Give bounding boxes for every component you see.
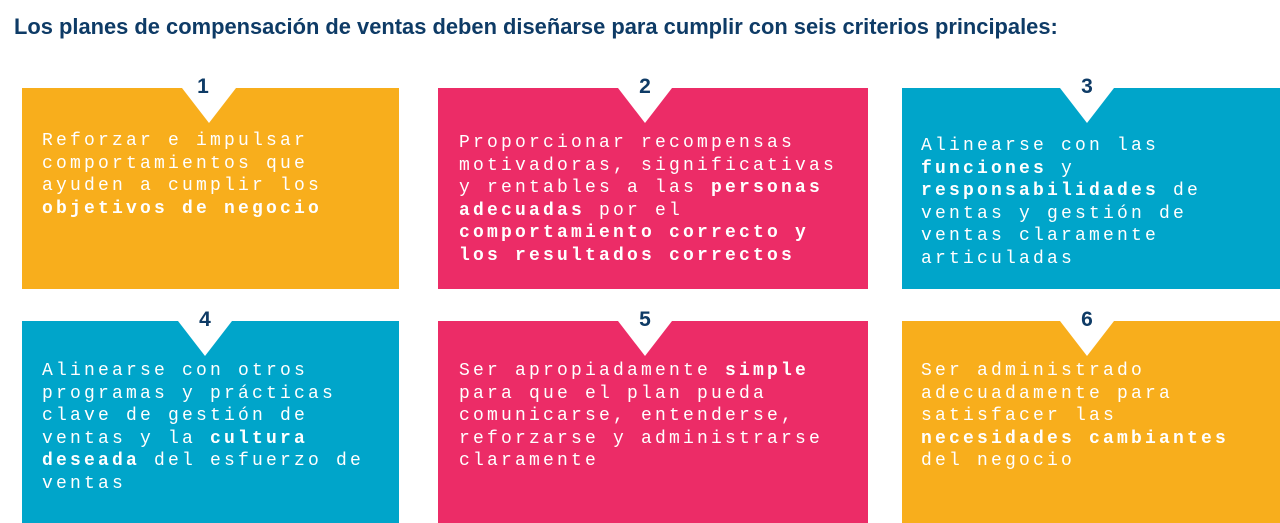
panel: criterion 2: comportamiento correcto y xyxy=(459,223,809,243)
panel: criterion 4 xyxy=(22,321,399,523)
title: Los planes de compensación de ventas deben diseñarse para cumplir con seis criterios principales: xyxy=(14,14,1058,39)
panel: criterion 4: Alinearse con otros xyxy=(42,361,308,381)
panel: criterion 4: deseada del esfuerzo de xyxy=(42,451,364,471)
panel: criterion 2: los resultados correctos xyxy=(459,246,795,266)
number 2: 2 xyxy=(639,75,651,98)
panel: criterion 1: comportamientos que xyxy=(42,154,308,174)
panel: criterion 1: ayuden a cumplir los xyxy=(42,176,322,196)
panel: criterion 2: adecuadas por el xyxy=(459,200,683,220)
panel: criterion 5 xyxy=(438,321,868,523)
panel: criterion 3: articuladas xyxy=(921,248,1075,268)
number 4: 4 xyxy=(199,308,211,331)
number 5: 5 xyxy=(639,308,651,331)
panel: criterion 6: Ser administrado xyxy=(921,361,1145,381)
panel: criterion 5: para que el plan pueda xyxy=(459,384,767,404)
panel: criterion 5: claramente xyxy=(459,451,599,471)
panel: criterion 3: Alinearse con las xyxy=(921,136,1159,156)
panel: criterion 3 xyxy=(902,88,1280,289)
panel: criterion 5: Ser apropiadamente simple xyxy=(459,361,809,381)
panel: criterion 3: ventas y gestión de xyxy=(921,204,1187,224)
panel: criterion 2: Proporcionar recompensas xyxy=(459,133,795,153)
panel: criterion 6 xyxy=(902,321,1280,523)
panel: criterion 6: del negocio xyxy=(921,451,1075,471)
panel: criterion 4: clave de gestión de xyxy=(42,406,308,426)
panel: criterion 3: funciones y xyxy=(921,158,1075,178)
panel: criterion 6: adecuadamente para xyxy=(921,384,1173,404)
panel: criterion 1 xyxy=(22,88,399,289)
panel: criterion 4: ventas xyxy=(42,474,126,494)
panel: criterion 3: ventas claramente xyxy=(921,226,1159,246)
panel: criterion 2: y rentables a las personas xyxy=(459,178,823,198)
number 1: 1 xyxy=(197,75,209,98)
panel: criterion 1: Reforzar e impulsar xyxy=(42,131,308,151)
panel: criterion 6: satisfacer las xyxy=(921,406,1117,426)
panel: criterion 2: motivadoras, significativas xyxy=(459,156,837,176)
panel: criterion 6: necesidades cambiantes xyxy=(921,428,1229,448)
panel: criterion 4: ventas y la cultura xyxy=(42,428,308,448)
number 6: 6 xyxy=(1081,308,1093,331)
panel: criterion 2 xyxy=(438,88,868,289)
panel: criterion 1: objetivos de negocio xyxy=(42,198,322,218)
panel: criterion 5: comunicarse, entenderse, xyxy=(459,406,795,426)
panel: criterion 5: reforzarse y administrarse xyxy=(459,428,823,448)
panel: criterion 4: programas y prácticas xyxy=(42,384,336,404)
number 3: 3 xyxy=(1081,75,1093,98)
panel: criterion 3: responsabilidades de xyxy=(921,181,1201,201)
